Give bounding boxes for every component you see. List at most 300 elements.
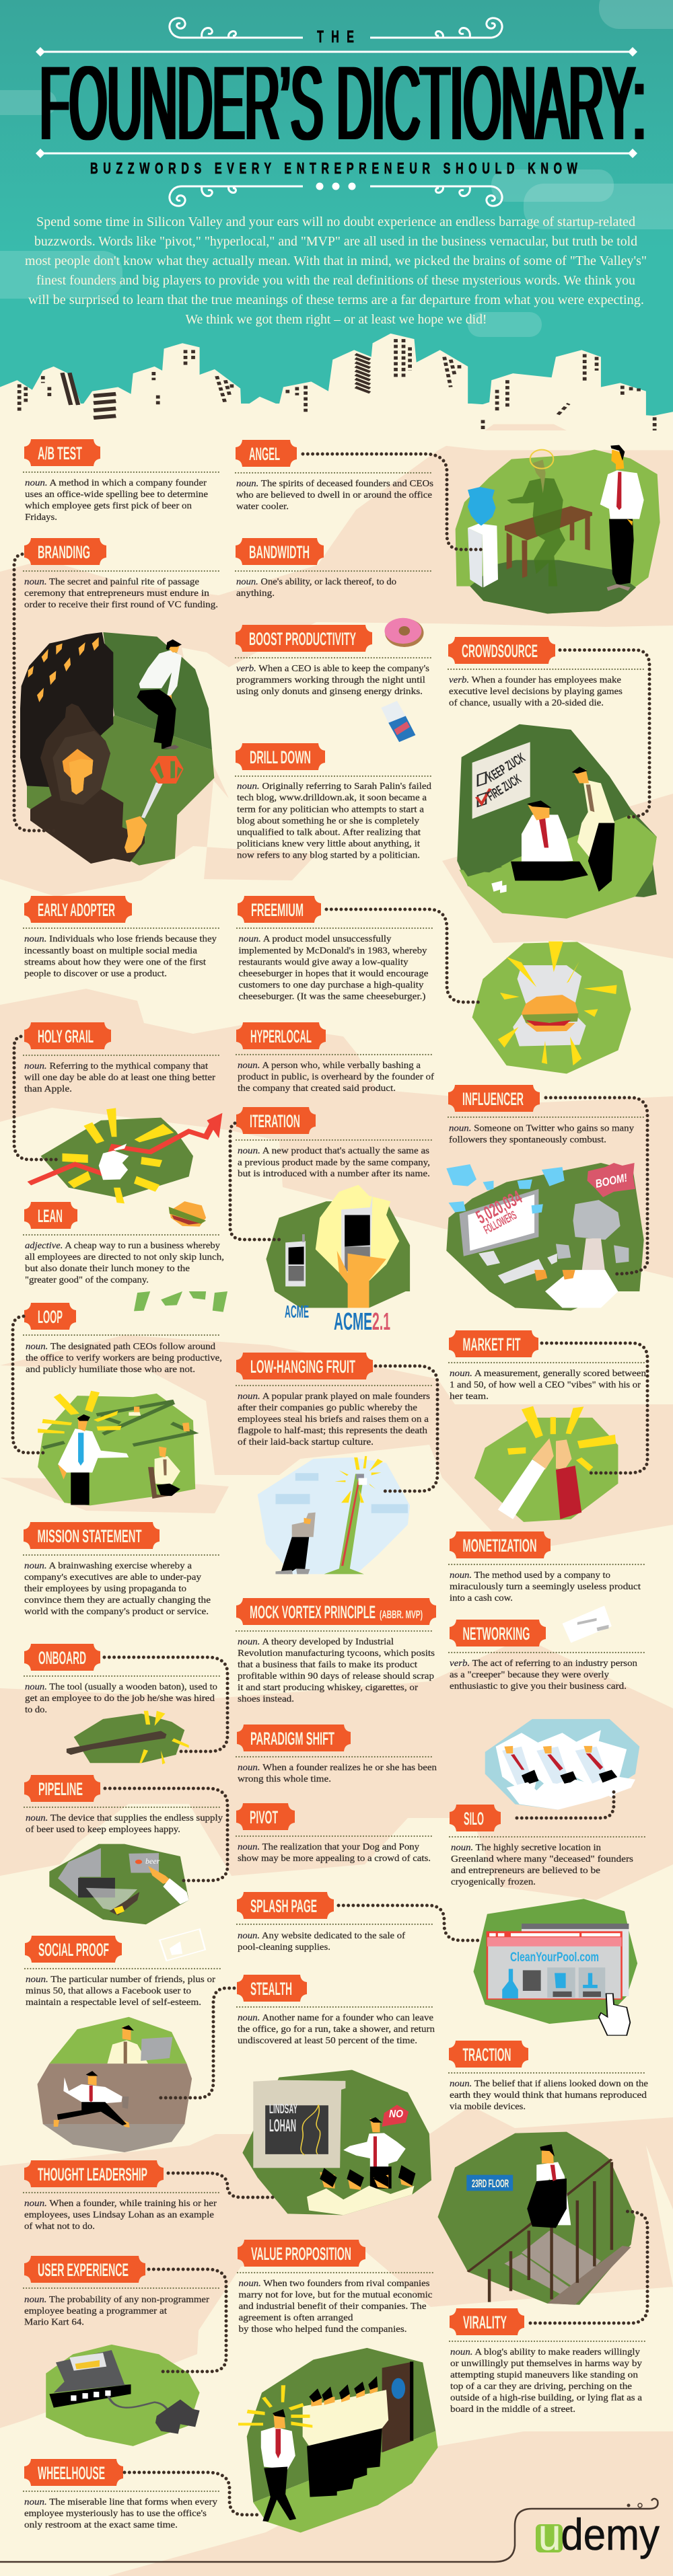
definition: Mario Kart 64. (24, 2318, 84, 2327)
intro text: Spend some time in Silicon Valley and your ears will no doubt experience an endless barrage of startup-related (36, 215, 635, 229)
entry: Bandwidth (236, 538, 431, 599)
definition (450, 1659, 637, 1692)
definition: by those who helped fund the companies. (238, 2324, 406, 2335)
entry: Onboard (24, 1644, 227, 1751)
definition (26, 1975, 215, 2008)
definition: the company that created said product. (238, 1084, 396, 1094)
tag: Social Proof (25, 1936, 122, 1963)
tag: Loop (24, 1303, 76, 1330)
definition: Revolution manufacturing tycoons, which posits (238, 1649, 435, 1659)
title: THE (317, 28, 354, 46)
definition: noun. The device that supplies the endless supply (26, 1813, 223, 1823)
illustration: like stamp (160, 1929, 205, 1961)
definition (238, 934, 428, 1002)
illustration text: floor sign: 23RD FLOOR (472, 2177, 509, 2190)
definition (24, 577, 218, 610)
illustration: money (134, 1291, 227, 1312)
illustration: business card (563, 1605, 612, 1642)
illustration text: sign: KEEP ZUCK (485, 751, 528, 785)
definition: noun. The secret and painful rite of passage (24, 577, 199, 587)
definition: politicians knew very little about anything, it (237, 839, 420, 849)
definition: convince them they are actually changing the (24, 1595, 211, 1605)
entry: Monetization (449, 1531, 645, 1603)
definition: noun. A method in which a company founder (25, 478, 207, 488)
illustration: pipeline (49, 1844, 189, 1924)
definition: as a "creeper" because they were overly (450, 1670, 609, 1680)
definition (236, 479, 433, 512)
tag: Boost Productivity: BOOST PRODUCTIVITY (249, 629, 356, 649)
definition: now refers to any blog started by a politician. (237, 850, 420, 861)
tag: Early Adopter (24, 896, 132, 923)
illustration: holy grail apple and chart (29, 1108, 222, 1203)
definition: of chance, usually with a 20-sided die. (449, 698, 604, 708)
entry: Social Proof (25, 1936, 221, 2008)
tag: Low-Hanging Fruit (236, 1353, 373, 1379)
entry: Angel (236, 440, 481, 550)
illustration: game console (46, 2345, 200, 2446)
illustration: branding (20, 632, 214, 866)
definition: noun. Any website dedicated to the sale of (238, 1931, 405, 1941)
definition: noun. The realization that your Dog and Pony (238, 1842, 419, 1852)
illustration: angel at water cooler (456, 445, 660, 613)
entry: Boost Productivity (236, 625, 431, 697)
entry: Hyperlocal (236, 1022, 434, 1094)
definition: maintain a respectable level of self-esteem. (26, 1998, 201, 2008)
illustration: low-hanging fruit (258, 1456, 410, 1574)
definition: pool-cleaning supplies. (238, 1942, 330, 1953)
definition (238, 1146, 430, 1179)
illustration text: followers and boom: FOLLOWERS (481, 1208, 519, 1237)
definition: the office to verify workers are being productive, (26, 1353, 222, 1363)
definition: into a cash cow. (450, 1593, 513, 1603)
entry: Value Proposition (238, 2240, 433, 2335)
tag: Drill Down (236, 743, 325, 770)
tag: Freemium (238, 896, 321, 923)
definition: miraculously turn a seemingly useless product (450, 1582, 641, 1592)
tag: Lean: LEAN (38, 1206, 63, 1226)
definition (238, 1763, 437, 1784)
tag: Wheelhouse: WHEELHOUSE (38, 2463, 105, 2483)
definition: implemented by McDonald's in 1983, whereby (238, 946, 427, 956)
definition: noun. The belief that if aliens looked down on the (450, 2079, 648, 2089)
tag: Onboard (24, 1644, 100, 1671)
definition: but is introduced with a number after its name. (238, 1169, 430, 1179)
illustration text: ACME logos: ACME (285, 1301, 309, 1322)
definition (238, 1061, 434, 1094)
tag: Hyperlocal: HYPERLOCAL (250, 1026, 312, 1047)
definition: that a business that fails to make its product (238, 1660, 417, 1670)
definition: Greenland where many "deceased" founders (451, 1854, 633, 1864)
definition: show may be more appealing to a crowd of cats. (238, 1854, 431, 1864)
tag: Thought Leadership: THOUGHT LEADERSHIP (38, 2164, 147, 2185)
tag: Boost Productivity (236, 625, 372, 652)
tag: Bandwidth: BANDWIDTH (249, 542, 310, 562)
tag: Mock Vortex Principle: (ABBR. MVP) (380, 1608, 423, 1621)
entry: Mission Statement (24, 1522, 219, 1617)
definition: noun. The method used by a company to (450, 1570, 610, 1581)
definition: outside of a high-rise building, or lying flat as a (450, 2393, 643, 2403)
tag: Traction: TRACTION (463, 2045, 511, 2065)
footer line and udemy logo: udemy (538, 2509, 660, 2559)
definition: followers they spontaneously combust. (449, 1135, 606, 1145)
definition: restaurants would give away a low-quality (238, 958, 408, 967)
tag: User Experience (24, 2256, 145, 2283)
definition: a previous product made by the same company, (238, 1158, 430, 1168)
illustration: influencer (446, 1163, 644, 1311)
tag: Silo: SILO (464, 1809, 484, 1829)
definition (24, 1061, 215, 1094)
definition: 1 and 50, of how well a CEO "vibes" with his or (450, 1380, 641, 1390)
definition: world with the company's product or service. (24, 1607, 209, 1617)
definition (24, 1561, 211, 1617)
entry: Silo (450, 1790, 645, 1887)
definition (236, 664, 429, 697)
tag: Stealth (237, 1975, 307, 2002)
entry: Splash Page (237, 1892, 482, 1953)
definition: get an employee to do the job he/she was hired (25, 1694, 215, 1704)
entry: Pivot (236, 1803, 432, 1864)
definition: top of a car they are driving, perching on the (450, 2382, 632, 2392)
tag: Hyperlocal (236, 1022, 326, 1049)
entry: Loop (13, 1303, 222, 1453)
tag: Value Proposition (238, 2240, 365, 2267)
definition: anything. (236, 589, 275, 599)
definition: their employees by using propaganda to (24, 1584, 186, 1594)
definition: incessantly boast on multiple social media (24, 946, 198, 956)
tag: Silo (450, 1805, 501, 1831)
illustration text: followers and boom: BOOM! (594, 1171, 629, 1190)
definition: cheeseburger in hopes that it would encourage (238, 969, 428, 979)
skyline (0, 334, 673, 450)
tag: Crowdsource (448, 637, 555, 664)
illustration text: sign (485, 751, 528, 804)
definition: ceremony that entrepreneurs must endure in (24, 589, 209, 599)
definition: marry not for love, but for the mutual economic (238, 2290, 432, 2300)
definition: agreement is often arranged (238, 2313, 353, 2323)
definition (238, 1842, 431, 1864)
definition (238, 1931, 405, 1953)
definition: customers to one day purchase a high-quality (238, 981, 424, 990)
entry: Paradigm Shift (236, 1725, 437, 1784)
header: teal sky (0, 0, 673, 417)
tag: Branding (24, 538, 106, 565)
definition: noun. The miserable line that forms when every (24, 2497, 217, 2507)
entry: Virality (450, 2211, 647, 2415)
entry: Market Fit (449, 1330, 647, 1473)
definition: earth they would think that humans reproduced (450, 2090, 647, 2100)
definition (238, 2279, 432, 2335)
intro text: finest founders and big players to provide you with the real definitions of these mysterious words. We think you (36, 273, 635, 288)
definition: executive level decisions by playing games (449, 687, 623, 697)
definition: or unwillingly put themselves in harms way by (450, 2359, 642, 2369)
definition: but also donate their lunch money to the (25, 1264, 190, 1274)
tag: Freemium: FREEMIUM (251, 900, 304, 920)
illustration: loop (38, 1391, 195, 1505)
illustration: social proof (37, 2017, 192, 2152)
definition: noun. A theory developed by Industrial (238, 1637, 394, 1647)
definition: verb. When a CEO is able to keep the company's (236, 664, 429, 674)
entry: Early Adopter (24, 896, 220, 979)
definition: employee beating a programmer at (24, 2306, 167, 2316)
definition: employees, uses Lindsay Lohan as an example (24, 2210, 214, 2220)
definition: noun. The spirits of deceased founders and CEOs (236, 479, 433, 489)
illustration: donut (384, 618, 424, 647)
illustration text: sign: FIRE ZUCK (485, 771, 524, 804)
tag: Loop: LOOP (38, 1307, 63, 1327)
definition: which employee gets first pick of beer on (25, 501, 192, 511)
tag: Mock Vortex Principle (236, 1598, 436, 1625)
tag: Pivot (236, 1803, 295, 1830)
title: BUZZWORDS EVERY ENTREPRENEUR SHOULD KNOW (90, 160, 577, 178)
definition (450, 1369, 646, 1402)
definition: programmers working through the night until (236, 675, 425, 685)
definition: noun. When two founders from rival companies (238, 2279, 429, 2289)
definition: verb. The act of referring to an industry person (450, 1659, 637, 1669)
tag: Market Fit (449, 1330, 538, 1357)
tag: Stealth: STEALTH (250, 1979, 292, 1999)
definition: and industrial benefit of their companies. The (238, 2302, 427, 2312)
tag: Pipeline: PIPELINE (38, 1779, 83, 1799)
definition (24, 934, 217, 979)
definition: noun. The particular number of friends, plus or (26, 1975, 215, 1985)
footer line and udemy logo (0, 2499, 660, 2562)
clouds (0, 0, 673, 337)
definition: blog about something he or she is completely (237, 817, 419, 826)
definition: who are believed to dwell in or around the office (236, 490, 432, 500)
tag: Iteration: ITERATION (250, 1111, 300, 1131)
definition: noun. The designated path CEOs follow around (26, 1342, 215, 1352)
illustration text: lindsay lohan (269, 2102, 403, 2135)
definition (26, 1342, 222, 1375)
tag: Virality (450, 2308, 524, 2335)
tag: Monetization (450, 1531, 551, 1558)
illustration: energy drink can (381, 701, 415, 742)
intro text: will be surprised to learn that the true meanings of these terms are a far departure from what you were expecting. (28, 293, 644, 307)
definition (450, 2347, 643, 2415)
entry: Drill Down (236, 743, 431, 861)
definition (25, 1241, 224, 1285)
ornaments (44, 18, 629, 206)
tag: Bandwidth (236, 538, 324, 565)
definition (450, 1570, 641, 1603)
tag: Iteration (236, 1107, 316, 1134)
definition (236, 577, 396, 599)
definition (238, 1392, 430, 1447)
tag: Networking: NETWORKING (463, 1624, 530, 1644)
definition: the office, go for a run, take a shower, and return (238, 2024, 435, 2035)
illustration: lean burger (169, 1201, 206, 1227)
definition: cryogenically frozen. (451, 1877, 536, 1887)
definition (238, 2013, 435, 2046)
illustration: market fit (474, 1406, 618, 1522)
tag: Mission Statement (24, 1522, 160, 1549)
illustration text: ACME logos: ACME2.1 (334, 1308, 390, 1335)
definition: flagpole to half-mast; this represents the death (238, 1426, 427, 1436)
definition: wrong this whole time. (238, 1774, 331, 1784)
definition: people to discover or use a product. (24, 969, 167, 979)
definition: noun. When a founder, while training his or her (24, 2199, 217, 2209)
entry: Mock Vortex Principle (236, 1598, 436, 1704)
definition: term for any politician who attempts to start a (237, 804, 425, 815)
definition: noun. A blog's ability to make readers willingly (450, 2347, 640, 2357)
definition: noun. A brainwashing exercise whereby a (24, 1561, 192, 1571)
tag: Early Adopter: EARLY ADOPTER (38, 900, 115, 920)
tag: A/B Test (24, 439, 100, 466)
intro text: We think we got them right – or at least we hope we did! (186, 312, 487, 327)
definition (449, 675, 623, 708)
illustration text: followers and boom (472, 1171, 629, 1237)
tag: Drill Down: DRILL DOWN (250, 747, 311, 767)
entry: Low-Hanging Fruit (236, 1353, 437, 1491)
tag: User Experience: USER EXPERIENCE (38, 2260, 129, 2280)
definition: adjective. A cheap way to run a business whereby (25, 1241, 220, 1251)
entry: Iteration (230, 1107, 431, 1240)
tag: Networking (450, 1620, 546, 1646)
definition (25, 1682, 217, 1715)
definition: noun. Someone on Twitter who gains so many (449, 1123, 634, 1134)
definition: and publicly humiliate those who are not. (26, 1365, 195, 1375)
definition: profitable within 90 days of release should scrap (238, 1671, 434, 1681)
tag: Onboard: ONBOARD (38, 1648, 86, 1668)
tag: Low-Hanging Fruit: LOW-HANGING FRUIT (250, 1357, 355, 1377)
illustration: silo (485, 1719, 639, 1810)
definition: it and start producing whiskey, cigarettes, or (238, 1683, 418, 1693)
tag: Social Proof: SOCIAL PROOF (38, 1940, 109, 1960)
definition: via mobile devices. (450, 2102, 526, 2112)
definition: tech blog, www.drilldown.ak, it soon became a (237, 793, 427, 803)
definition: "greater good" of the company. (25, 1275, 149, 1285)
illustration text: lindsay lohan: NO (389, 2109, 403, 2120)
tag: Value Proposition: VALUE PROPOSITION (251, 2244, 351, 2264)
definition: all employees are directed to not only skip lunch, (25, 1252, 224, 1262)
definition: enthusiastic to give you their business card. (450, 1681, 627, 1692)
illustration: virality stairs (438, 2132, 635, 2305)
definition: and entrepreneurs are believed to be (451, 1866, 600, 1876)
entry: Lean (24, 1202, 224, 1285)
tag: Lean (24, 1202, 77, 1229)
entry: Pipeline (24, 1775, 227, 1881)
definition: her team. (450, 1392, 489, 1402)
definition: only restroom at the exact same time. (24, 2520, 178, 2530)
definition (450, 2079, 648, 2112)
definition: after their companies go public whereby the (238, 1403, 417, 1413)
definition (24, 2199, 217, 2232)
intro text (25, 215, 647, 327)
definition (449, 1123, 634, 1145)
definition: minus 50, that allows a Facebook user to (26, 1986, 191, 1996)
tag: Crowdsource: CROWDSOURCE (462, 641, 538, 661)
definition: noun. Referring to the mythical company that (24, 1061, 208, 1071)
tag: Holy Grail (24, 1022, 111, 1049)
definition: noun. A product model unsuccessfully (238, 934, 392, 944)
tag: Mission Statement: MISSION STATEMENT (38, 1526, 142, 1546)
illustration text: lindsay lohan: LINDSAY (269, 2102, 297, 2117)
definition (25, 478, 208, 523)
definition: order to receive their first round of VC funding. (24, 600, 218, 610)
illustration: iteration phones (266, 1185, 410, 1308)
illustration: wheelhouse line (238, 2348, 438, 2533)
definition: noun. Originally referring to Sarah Palin's failed (237, 782, 431, 792)
tag: Monetization: MONETIZATION (463, 1536, 537, 1556)
tag: Angel (236, 440, 297, 467)
illustration text: ACME logos (285, 1301, 390, 1335)
definition (237, 782, 431, 861)
tag: Pipeline (24, 1775, 100, 1802)
definition: company's executives are able to under-pay (24, 1573, 201, 1583)
intro text: buzzwords. Words like "pivot," "hyperlocal," and "MVP" are all used in the business vernacular, but truth be told (34, 234, 637, 249)
definition: unqualified to talk about. After realizing that (237, 827, 421, 838)
tag: Thought Leadership (24, 2160, 164, 2187)
definition: product in public, is overheard by the founder of (238, 1072, 434, 1082)
entry: Freemium (237, 896, 480, 1002)
illustration text: lindsay lohan: LOHAN (269, 2115, 296, 2135)
definition: undiscovered at least 50 percent of the time. (238, 2036, 417, 2046)
entry: Branding (14, 538, 219, 831)
definition: of beer used to keep employees happy. (26, 1825, 180, 1835)
illustration: thought leadership lecture (242, 2070, 431, 2215)
tag: Splash Page: SPLASH PAGE (250, 1896, 317, 1916)
entry: Stealth (159, 1975, 435, 2098)
tag: Influencer (448, 1085, 540, 1112)
definition: noun. Another name for a founder who can leave (238, 2013, 433, 2023)
entry: User Experience (24, 2256, 226, 2372)
tag: Virality: VIRALITY (463, 2312, 507, 2333)
entry: Traction (449, 2041, 648, 2112)
illustration text: website name: CleanYourPool.com (510, 1950, 599, 1965)
tag: Holy Grail: HOLY GRAIL (38, 1026, 94, 1047)
definition: to do. (25, 1705, 47, 1715)
entry: A/B Test (24, 439, 219, 523)
definition (26, 1813, 223, 1835)
definition: noun. A new product that's actually the same as (238, 1146, 429, 1156)
tag: Mock Vortex Principle: MOCK VORTEX PRINCIPLE (250, 1602, 376, 1622)
definition: attempting stupid maneuvers like standing on (450, 2370, 638, 2380)
definition (24, 2295, 209, 2327)
definition: Fridays. (25, 513, 57, 523)
tag: Pivot: PIVOT (250, 1807, 278, 1827)
definition (24, 2497, 217, 2530)
definition: using only donuts and ginseng energy drinks. (236, 687, 423, 697)
definition: employees steal his briefs and raises them on a (238, 1414, 429, 1425)
tag: Traction (449, 2041, 528, 2068)
definition: of their laid-back startup culture. (238, 1437, 374, 1447)
definition: cheeseburger. (It was the same cheeseburger.) (238, 991, 426, 1002)
definition: than Apple. (24, 1084, 72, 1094)
tag: Wheelhouse (24, 2459, 123, 2486)
tag: Branding: BRANDING (38, 542, 90, 562)
definition (238, 1637, 435, 1704)
tag: Paradigm Shift: PARADIGM SHIFT (250, 1729, 334, 1749)
definition: uses an office-wide spelling bee to determine (25, 490, 208, 500)
illustration text: beer button: beer (145, 1856, 160, 1866)
definition: will one day be able do at least one thing better (24, 1073, 215, 1083)
definition: of what not to do. (24, 2222, 95, 2232)
definition: noun. When a founder realizes he or she has been (238, 1763, 437, 1773)
tag: Influencer: INFLUENCER (462, 1089, 524, 1109)
entry: Wheelhouse (24, 2459, 260, 2530)
tag: Paradigm Shift (237, 1725, 351, 1751)
illustration: freemium burger (472, 942, 631, 1073)
definition: noun. A popular prank played on male founders (238, 1392, 430, 1402)
illustration: splash page (473, 1899, 637, 2035)
definition (451, 1843, 633, 1887)
definition: noun. The highly secretive location in (451, 1843, 601, 1853)
intro text: most people don't know what they actually mean. With that in mind, we picked the brains of some of "The Valley's" (25, 254, 647, 268)
definition: streams about how they were one of the first (24, 958, 206, 967)
definition: verb. When a founder has employees make (449, 675, 621, 685)
entry: Holy Grail (14, 1022, 219, 1160)
definition: noun. A measurement, generally scored between (450, 1369, 646, 1379)
